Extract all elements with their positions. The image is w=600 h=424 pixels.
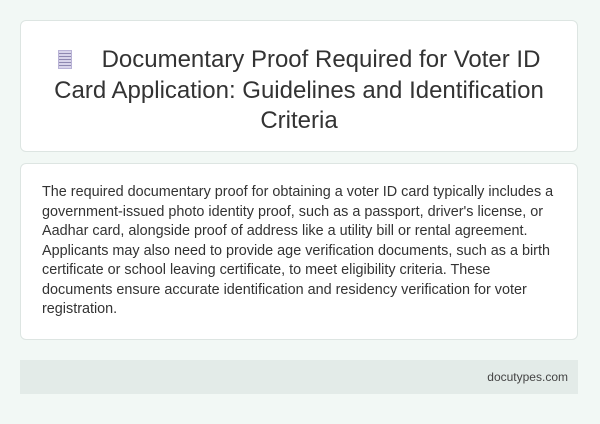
description text: Aadhar card, alongside proof of address like a utility bill or rental agreement. — [42, 223, 528, 239]
title panel — [20, 20, 578, 152]
description text: registration. — [42, 301, 117, 317]
title: Criteria — [260, 107, 338, 134]
description text: government-issued photo identity proof, such as a passport, driver's license, or — [42, 204, 543, 220]
description text: certificate or school leaving certificate, to meet eligibility criteria. These — [42, 262, 490, 278]
description text: Applicants may also need to provide age verification documents, such as a birth — [42, 242, 550, 258]
footer bar — [20, 360, 578, 394]
title — [54, 46, 544, 134]
title: Card Application: Guidelines and Identification — [54, 76, 544, 104]
description panel — [20, 163, 578, 340]
title: Documentary Proof Required for Voter ID — [102, 46, 540, 73]
description text: documents ensure accurate identification and residency verification for voter — [42, 282, 527, 298]
icon: document — [58, 50, 72, 69]
description text: The required documentary proof for obtaining a voter ID card typically includes a — [42, 184, 553, 200]
description text — [42, 184, 554, 317]
footer text: docutypes.com — [487, 370, 568, 384]
